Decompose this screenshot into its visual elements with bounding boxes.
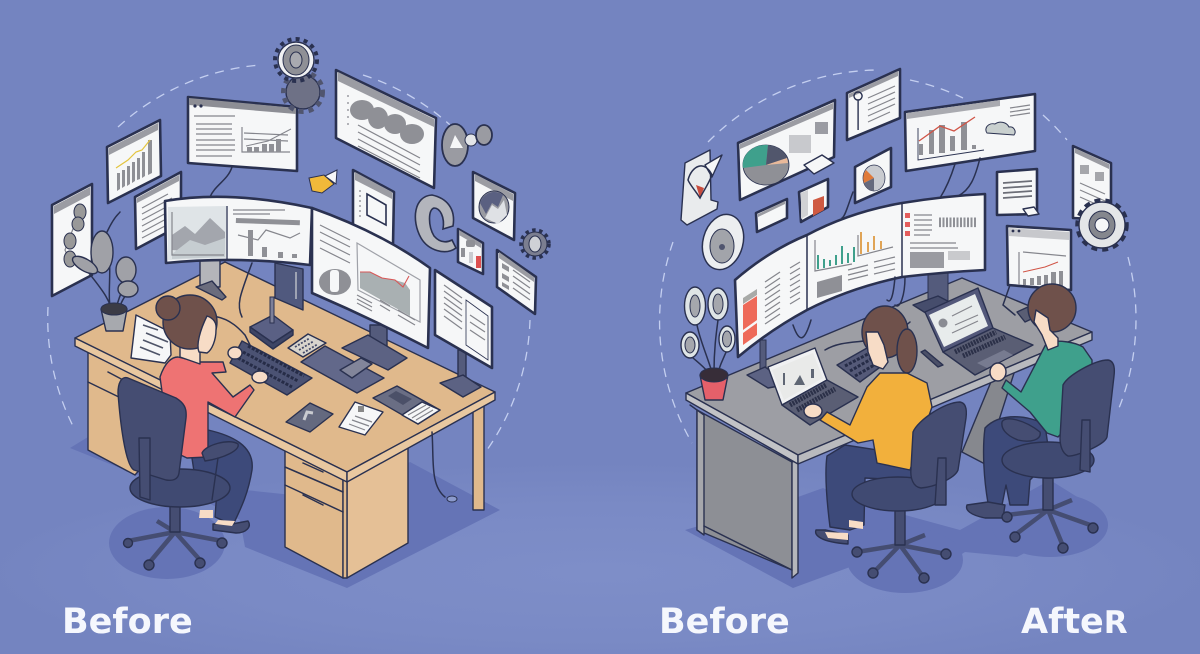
floating panel: right with gear (1073, 146, 1111, 220)
cable (432, 432, 445, 497)
floating panel: bars and lines (1007, 226, 1071, 290)
arm (935, 458, 946, 505)
floating panel: small pie (855, 148, 891, 203)
floating panel: list (497, 250, 536, 314)
cables under monitors (793, 277, 910, 350)
seat (852, 477, 944, 511)
desk top (75, 262, 495, 472)
icon: tablet stand (275, 263, 303, 310)
feet (816, 530, 848, 544)
floor shadow: before chair (109, 507, 225, 579)
backrest (118, 378, 186, 480)
desk edge (75, 338, 347, 482)
hand (990, 363, 1006, 381)
face (198, 316, 216, 353)
ponytail (897, 329, 917, 373)
icons: pie shapes (442, 124, 492, 166)
person: teal shirt (967, 284, 1092, 518)
cables to small panels (842, 192, 853, 218)
monitor: curved dual (165, 197, 312, 300)
hair (1028, 284, 1076, 332)
cable: top panel to monitor (210, 167, 232, 197)
screen (312, 208, 430, 348)
base (128, 521, 222, 563)
floating panel: pie report (738, 100, 835, 200)
screen 3 content (905, 213, 976, 268)
label: after: AfteR (1021, 602, 1128, 642)
floating panel: note (997, 169, 1039, 216)
gear: small right (521, 230, 549, 258)
desk left pedestal (88, 350, 200, 475)
torso and arms (160, 357, 254, 458)
floating panel: top-right chart (905, 94, 1035, 171)
desk: before (75, 262, 495, 578)
backrest (1060, 360, 1114, 456)
screen (165, 197, 312, 265)
plant: before (70, 212, 138, 331)
feet (967, 502, 1005, 518)
monitor stand (200, 260, 220, 287)
hair (163, 295, 217, 349)
dashed circle: team (660, 70, 1136, 443)
legs (984, 417, 1050, 505)
floor shadow: team desk (685, 480, 1103, 592)
monitor: large right (312, 208, 430, 370)
floor shadow: before desk (70, 437, 500, 588)
person: before (156, 295, 268, 533)
hair back (862, 306, 908, 358)
base (1007, 500, 1093, 546)
floating panel: top centre report (188, 97, 297, 171)
right arm (1080, 420, 1090, 472)
gear: right (1077, 200, 1127, 250)
laptop right (925, 288, 1033, 375)
left arm (139, 438, 150, 500)
monitor: right portrait (435, 270, 492, 397)
chair: yellow shirt person (852, 402, 966, 583)
monitor: triple curved (735, 194, 985, 357)
floating panel: plant chart (52, 184, 92, 296)
cables (160, 263, 252, 345)
trackpad device (301, 346, 384, 393)
front pedestal (697, 410, 792, 570)
legs (190, 430, 252, 525)
desk leg (473, 398, 484, 510)
floating panel: blank (756, 199, 787, 232)
torso (820, 373, 932, 470)
chair: teal shirt person (1002, 360, 1114, 553)
floating panel: pie window (473, 172, 515, 240)
seat (1002, 442, 1094, 478)
legs (826, 445, 915, 530)
label: before left: Before (62, 602, 193, 642)
microphone base (250, 297, 293, 349)
seat (130, 469, 230, 507)
hands (228, 347, 242, 359)
floating panel: red block (799, 179, 828, 222)
neck (180, 343, 200, 364)
screen 2 content (815, 232, 895, 298)
monitor stand (913, 270, 965, 322)
torso (1002, 341, 1092, 437)
paper on desk (339, 402, 383, 435)
floating icon: white bird shape (681, 150, 722, 225)
bun (156, 296, 180, 320)
plant: team (681, 287, 735, 400)
small device with key icon (286, 403, 333, 432)
label: before right: Before (659, 602, 790, 642)
phone on desk (921, 350, 943, 367)
floor shadow: man chair (992, 493, 1108, 557)
chair: before (118, 378, 238, 570)
dashed circle: before (48, 65, 530, 450)
left monitor stand (747, 340, 790, 388)
device with papers (373, 386, 440, 424)
base (857, 535, 946, 578)
floating panel: axes chart (353, 170, 394, 245)
desk: team (686, 278, 1092, 578)
hand (804, 404, 822, 418)
foot (213, 521, 249, 533)
paper on left (131, 315, 171, 363)
face (866, 332, 888, 369)
drawer handle (88, 372, 125, 400)
floor shadow: team chair (847, 527, 963, 593)
floating panel: text (135, 172, 181, 249)
icon: yellow folder (309, 170, 337, 193)
desk top (686, 278, 1092, 455)
stand (370, 325, 387, 355)
floating panel: line and bar chart (107, 120, 161, 203)
keyboard (230, 341, 312, 395)
icon: swirl (415, 195, 456, 252)
cables to top-right panel (940, 158, 980, 198)
face (1034, 310, 1058, 350)
back panel (962, 360, 1015, 464)
floating panel: sidebar text (847, 69, 900, 140)
person: yellow shirt (804, 306, 932, 544)
right pedestal (285, 440, 408, 578)
right small monitor stand (1003, 285, 1040, 322)
laptop left (768, 348, 858, 425)
floating icon: disc (696, 210, 750, 274)
screen (435, 270, 492, 368)
desk edge (686, 393, 798, 464)
screen 1 content (743, 262, 800, 345)
gears: top (275, 39, 322, 112)
right arm (202, 442, 238, 461)
floating panel: flow diagram (458, 229, 483, 274)
numpad (288, 334, 326, 357)
floating panel: blob chart (336, 70, 436, 188)
keyboard: team (837, 348, 883, 382)
backrest (911, 402, 966, 488)
left arm (1002, 419, 1040, 441)
stand (458, 350, 466, 385)
